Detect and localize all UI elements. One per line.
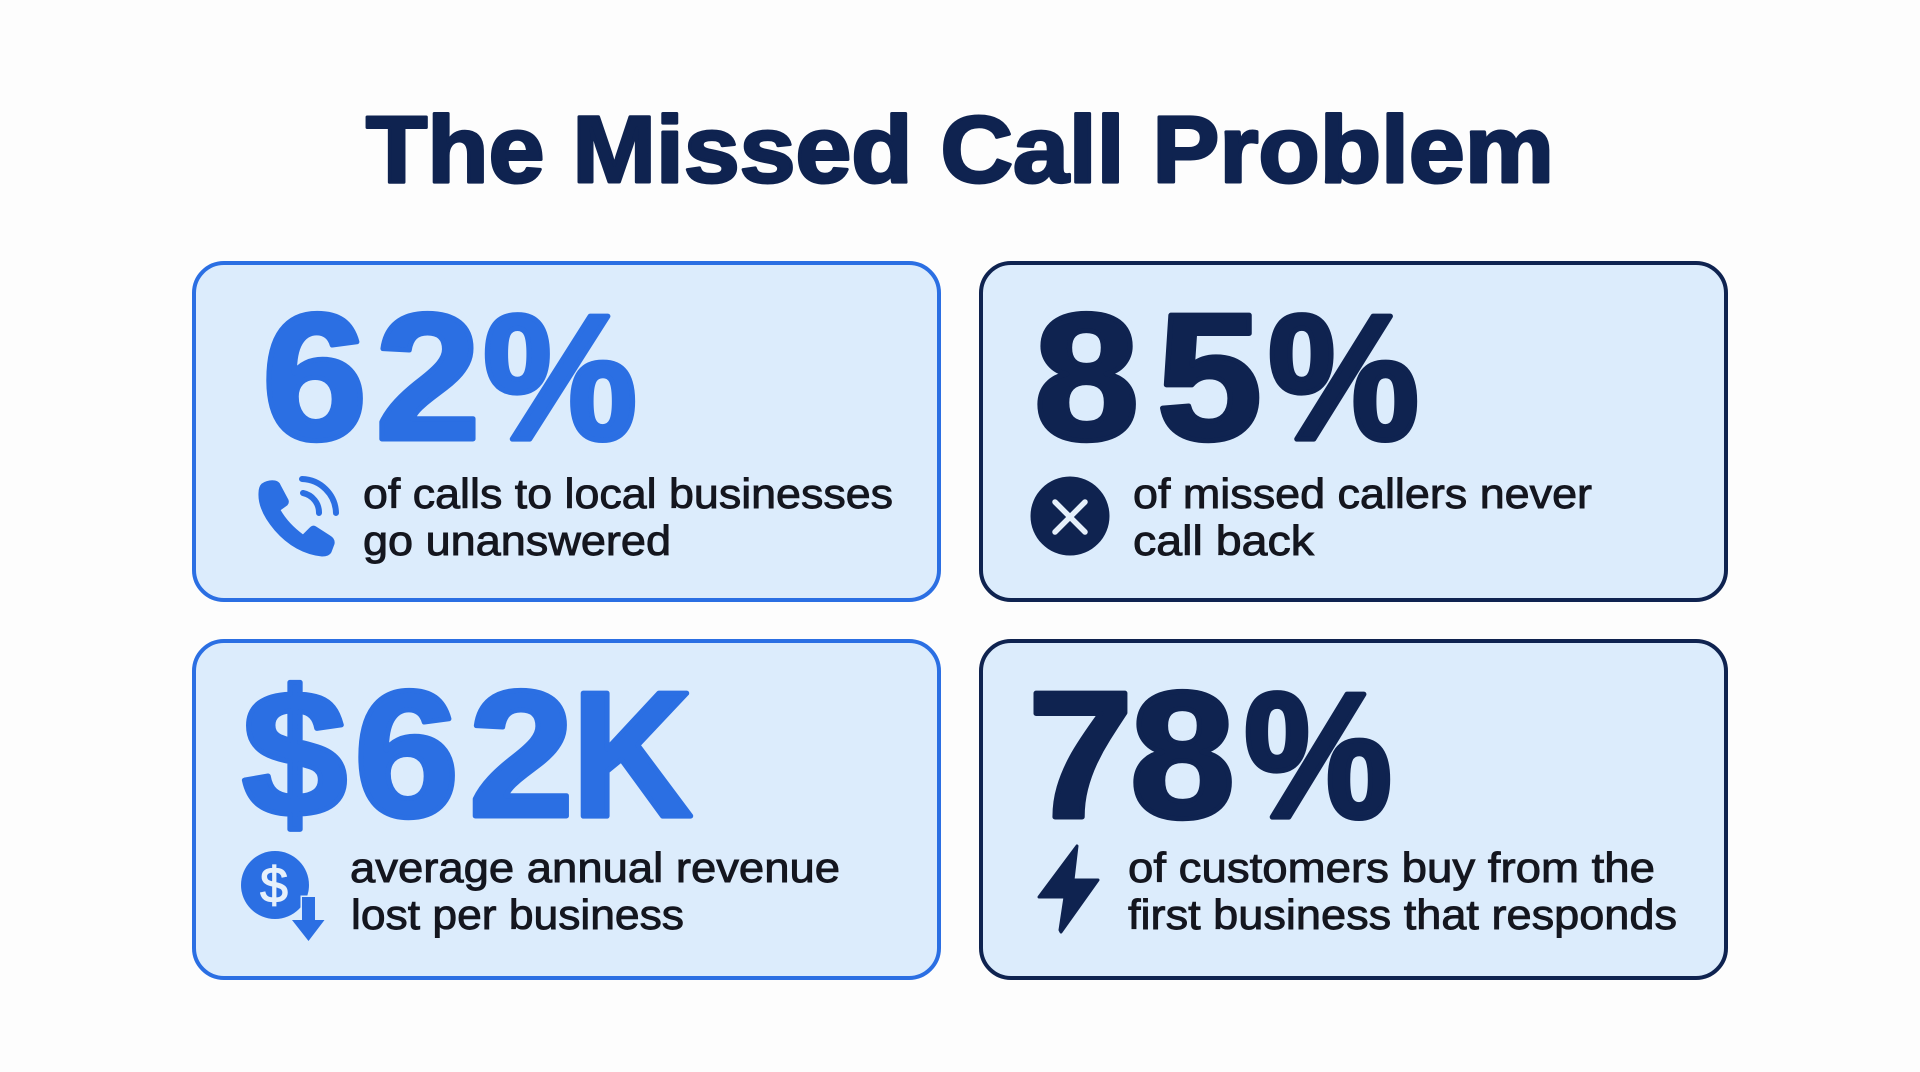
panel: 85% never call back	[981, 263, 1726, 600]
panel: 62% of calls unanswered	[194, 263, 939, 600]
stat: $62K: 2	[469, 654, 574, 855]
icon: x in circle	[1030, 476, 1110, 556]
description: never call back: of missed callers never	[1133, 470, 1592, 517]
icon: lightning bolt	[1039, 846, 1098, 932]
stat: 78%: %	[1244, 656, 1392, 855]
description: never call back: call back	[1133, 517, 1315, 564]
stat: $62K	[242, 654, 692, 855]
stat: $62K: K	[572, 655, 692, 854]
stat: 62%	[262, 277, 637, 478]
stat: 62%: 6	[262, 277, 367, 478]
icon: dollar coin with down arrow	[241, 851, 324, 941]
stat: 62%: %	[483, 279, 637, 478]
stat: $62K: 6	[354, 654, 459, 855]
stat: 85%: 8	[1034, 277, 1139, 478]
description: revenue lost: average annual revenue	[350, 844, 840, 891]
description: first responder: first business that responds	[1128, 891, 1677, 938]
icon: phone with signal waves	[259, 479, 336, 556]
stat: 85%	[1034, 277, 1419, 478]
stat: 62%: 2	[375, 277, 481, 478]
description: first responder	[1128, 844, 1677, 938]
stat: 85%: %	[1268, 277, 1419, 477]
description: first responder: of customers buy from the	[1128, 844, 1655, 891]
title: The Missed Call Problem	[366, 97, 1554, 203]
description: calls unanswered: go unanswered	[363, 517, 671, 564]
panel: $62K revenue lost	[194, 641, 939, 978]
description: revenue lost	[350, 844, 840, 938]
stat: 78%: 7	[1028, 655, 1133, 856]
stat: 85%: 5	[1157, 277, 1262, 478]
icon: dollar coin with down arrow: $	[260, 857, 288, 913]
stat: $62K: $	[242, 654, 347, 855]
description: never call back	[1133, 470, 1592, 564]
stat: 78%	[1028, 655, 1392, 856]
stat: 78%: 8	[1130, 655, 1235, 856]
description: revenue lost: lost per business	[351, 891, 684, 938]
description: calls unanswered: of calls to local businesses	[363, 470, 893, 517]
description: calls unanswered	[363, 470, 893, 564]
panel: 78% buy from first responder	[981, 641, 1726, 978]
